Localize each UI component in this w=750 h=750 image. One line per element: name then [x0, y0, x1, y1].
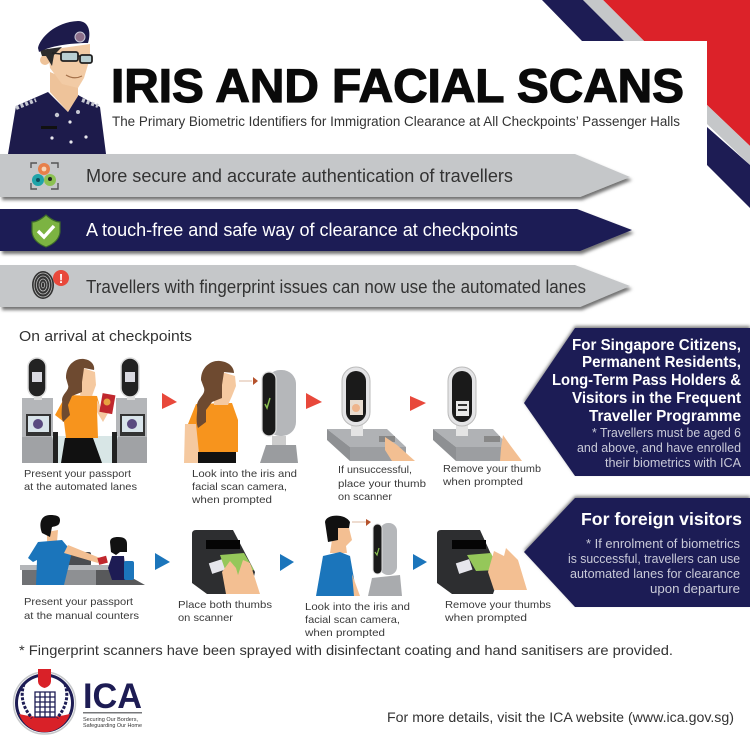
arrow: red 1	[162, 393, 177, 409]
caption: step 1: Present your passport	[24, 468, 131, 480]
caption: step 6: on scanner	[178, 612, 234, 624]
panel: benefit 3	[0, 265, 630, 307]
step 4: remove thumb illustration	[433, 367, 522, 461]
caption: step 8	[444, 599, 551, 624]
note: age requirement: and above, and have enrolled	[577, 441, 741, 455]
website note: For more details, visit the ICA website (www.ica.gov.sg)	[387, 710, 734, 725]
note: enrolment	[568, 537, 740, 596]
caption: step 4	[442, 463, 541, 488]
caption: step 1: at the automated lanes	[24, 481, 137, 493]
arrow: blue 1	[155, 553, 170, 570]
decorative corner stripes	[542, 0, 750, 208]
icon: face and iris scan	[31, 163, 58, 189]
heading: eligible travellers: Permanent Residents,	[582, 354, 741, 371]
caption: step 4: Remove your thumb	[443, 463, 541, 475]
caption: step 5	[24, 596, 139, 622]
caption: step 3	[338, 464, 426, 503]
note: age requirement: * Travellers must be aged 6	[592, 426, 741, 440]
subtitle: The Primary Biometric Identifiers for Immigration Clearance at All Checkpoints’ Passenger Halls	[112, 114, 680, 129]
caption: step 4: when prompted	[442, 476, 523, 488]
caption: step 2	[191, 468, 297, 506]
note: enrolment: automated lanes for clearance	[570, 567, 740, 581]
caption: step 3: on scanner	[338, 491, 393, 503]
arrow: red 3	[410, 396, 426, 411]
caption: step 8: Remove your thumbs	[445, 599, 551, 611]
icon: fingerprint with alert	[32, 270, 69, 299]
caption: step 7: when prompted	[304, 627, 385, 639]
note: enrolment: * If enrolment of biometrics	[586, 537, 740, 551]
caption: step 2: when prompted	[191, 494, 272, 506]
logo: ICA wordmark: ICA	[83, 677, 142, 716]
heading: foreign visitors: For foreign visitors	[581, 509, 742, 529]
caption: step 6: Place both thumbs	[178, 599, 272, 611]
heading: eligible travellers: Long-Term Pass Holders &	[552, 372, 741, 389]
title: IRIS AND FACIAL SCANS	[111, 59, 684, 112]
arrow: red 2	[306, 393, 322, 409]
heading: on arrival: On arrival at checkpoints	[19, 328, 192, 345]
heading: eligible travellers: Visitors in the Frequent	[572, 390, 741, 407]
heading: eligible travellers: For Singapore Citizens,	[572, 337, 741, 354]
caption: step 1	[24, 468, 137, 493]
text: benefit 2: A touch-free and safe way of clearance at checkpoints	[86, 220, 518, 240]
arrow: blue 3	[413, 554, 427, 570]
caption: step 7: facial scan camera,	[305, 614, 400, 626]
caption: step 3: place your thumb	[338, 478, 426, 490]
caption: step 3: If unsuccessful,	[338, 464, 412, 476]
text: benefit 1: More secure and accurate authentication of travellers	[86, 166, 513, 186]
step 8: remove thumbs illustration	[437, 530, 527, 594]
panel: benefit 1	[0, 154, 630, 197]
icon: green shield	[32, 215, 60, 247]
step 6: both thumbs scanner illustration	[192, 530, 260, 594]
caption: step 5: at the manual counters	[24, 610, 139, 622]
step 2: iris scan illustration	[184, 361, 298, 463]
text: benefit 3: Travellers with fingerprint issues can now use the automated lanes	[86, 277, 586, 297]
caption: step 2: Look into the iris and	[192, 468, 297, 480]
note: age requirement	[577, 426, 742, 470]
note: enrolment: is successful, travellers can use	[568, 552, 740, 566]
caption: step 6	[178, 599, 272, 624]
heading: eligible travellers	[552, 337, 741, 425]
caption: step 8: when prompted	[444, 612, 527, 624]
step 3: thumb scanner illustration	[327, 367, 415, 461]
step 5: manual counter illustration	[20, 515, 145, 585]
arrow: blue 2	[280, 554, 294, 571]
step 7: iris scan by foreign visitor illustration	[316, 516, 402, 596]
note: enrolment: upon departure	[650, 582, 740, 596]
panel: benefit 2	[0, 209, 632, 251]
icon: fingerprint with alert: !	[59, 271, 63, 286]
caption: step 7: Look into the iris and	[305, 601, 410, 613]
logo: ICA crest	[14, 669, 76, 734]
logo: ICA wordmark: Securing Our Borders,	[83, 717, 138, 723]
panel: foreign visitors	[524, 498, 750, 607]
heading: eligible travellers: Traveller Programme	[589, 408, 741, 425]
caption: step 5: Present your passport	[24, 596, 133, 608]
note: age requirement: their biometrics with ICA	[605, 456, 742, 470]
caption: step 2: facial scan camera,	[192, 481, 287, 493]
panel: citizens and residents	[524, 328, 750, 476]
footnote: * Fingerprint scanners have been sprayed with disinfectant coating and hand sanitisers are provided.	[19, 642, 673, 658]
icon: immigration officer	[8, 21, 106, 154]
caption: step 7	[304, 601, 410, 639]
logo: ICA wordmark: Safeguarding Our Home	[83, 723, 142, 729]
step 1: automated lanes illustration	[22, 358, 147, 463]
